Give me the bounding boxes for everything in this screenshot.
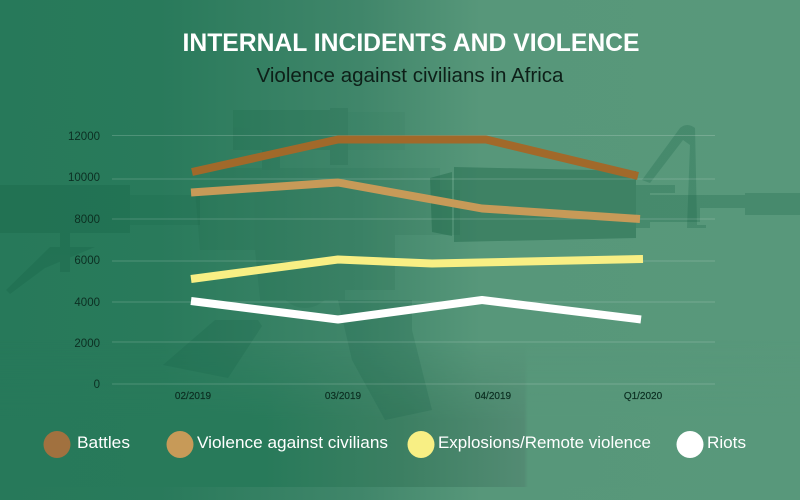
legend [44, 431, 746, 458]
rifle barrel [636, 185, 800, 228]
title: INTERNAL INCIDENTS AND VIOLENCE [182, 29, 640, 57]
x axis labels: 02/2019 [175, 391, 212, 402]
y axis labels: 4000 [74, 297, 100, 309]
rifle scope [210, 108, 440, 190]
legend: battles: Battles [77, 434, 130, 452]
rifle silhouette [0, 108, 800, 420]
rifle magazine [338, 300, 432, 420]
line: explosions/remote violence [191, 259, 643, 279]
rifle receiver [195, 190, 460, 308]
rifle handguard [454, 167, 636, 242]
subtitle: Violence against civilians in Africa [256, 65, 564, 87]
legend: explosions/remote violence: Explosions/Remote violence [438, 434, 651, 452]
y axis labels: 8000 [74, 214, 100, 226]
y axis labels: 0 [94, 379, 100, 391]
y axis labels [68, 131, 100, 391]
y axis labels: 6000 [74, 255, 100, 267]
rifle stock [0, 185, 200, 294]
legend: violence against civilians [166, 431, 388, 458]
legend: riots [676, 431, 746, 458]
y axis labels: 2000 [74, 338, 100, 350]
legend: battles [44, 431, 130, 458]
line: battles [192, 140, 638, 176]
x axis labels: 03/2019 [325, 391, 362, 402]
legend: riots: Riots [707, 434, 746, 452]
x axis labels: Q1/2020 [624, 391, 663, 402]
line chart [191, 140, 643, 320]
x axis labels [175, 391, 663, 402]
x axis labels: 04/2019 [475, 391, 512, 402]
y axis labels: 12000 [68, 131, 100, 143]
line: violence against civilians [191, 182, 640, 219]
rifle front sight [642, 125, 706, 228]
legend: violence against civilians: Violence against civilians [197, 434, 388, 452]
background [212, 0, 800, 500]
y axis labels: 10000 [68, 172, 100, 184]
grid lines [112, 136, 715, 384]
legend: explosions/remote violence [408, 431, 651, 458]
rifle gas block [430, 172, 452, 236]
rifle grip [163, 320, 262, 378]
line: riots [191, 300, 641, 320]
